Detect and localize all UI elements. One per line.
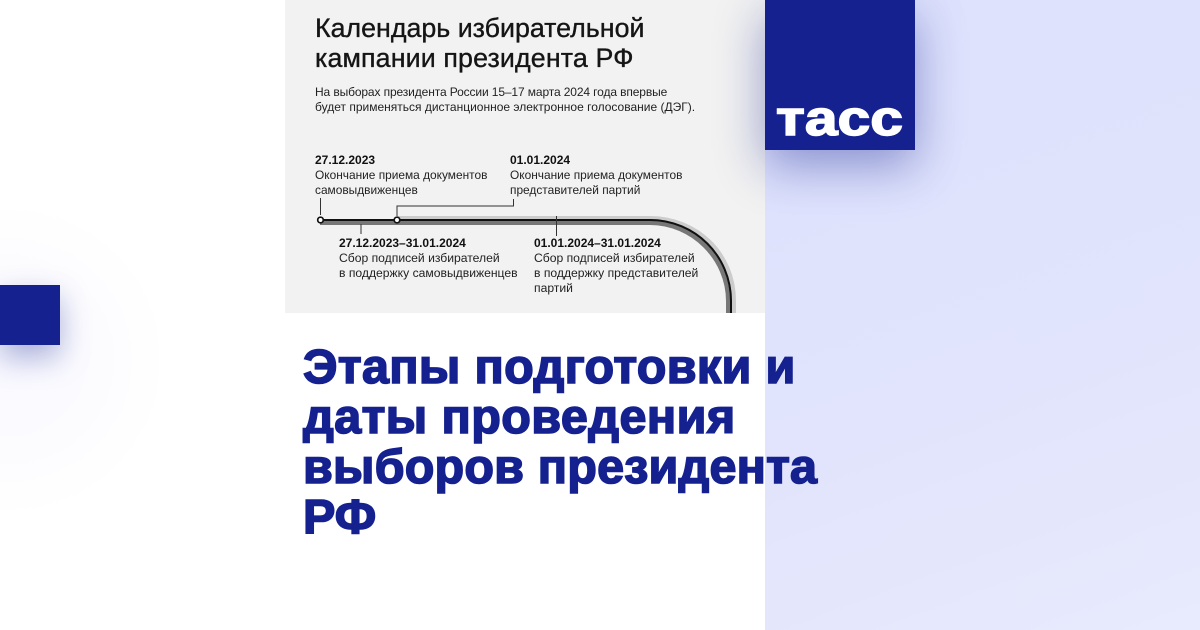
background: left soft glow [0,200,170,520]
milestone 01.01.2024: представителей партий [510,183,640,197]
logo block: TASS [765,0,915,150]
period: self-nominated signatures: 27.12.2023–31.01.2024 [339,236,466,250]
milestone 01.01.2024 [510,153,682,197]
background: right lilac panel [765,0,1200,630]
period: self-nominated signatures [339,236,518,280]
main title: РФ [303,490,376,544]
main title: Этапы подготовки и [303,340,796,394]
infographic heading: Календарь избирательной [315,13,644,43]
period: party signatures: партий [534,281,573,295]
panel: infographic preview [285,0,765,313]
period: party signatures: Сбор подписей избирателей [534,251,695,265]
milestone 27.12.2023 [315,153,487,197]
main title: выборов президента [303,440,817,494]
milestone 27.12.2023: самовыдвиженцев [315,183,418,197]
infographic intro text: будет применяться дистанционное электронное голосование (ДЭГ). [315,100,695,114]
milestone 01.01.2024: 01.01.2024 [510,153,570,167]
period: party signatures [534,236,698,295]
period: self-nominated signatures: Сбор подписей избирателей [339,251,500,265]
period: party signatures: в поддержку представителей [534,266,698,280]
decorative blue square [0,285,60,345]
period: self-nominated signatures: в поддержку самовыдвиженцев [339,266,518,280]
milestone 27.12.2023: 27.12.2023 [315,153,375,167]
main title: даты проведения [303,390,736,444]
infographic heading [315,13,644,73]
milestone 01.01.2024: Окончание приема документов [510,168,682,182]
timeline chart [316,198,736,313]
period: party signatures: 01.01.2024–31.01.2024 [534,236,661,250]
infographic heading: кампании президента РФ [315,43,634,73]
infographic intro text [315,85,695,114]
logo wordmark: тасс [776,92,903,146]
infographic intro text: На выборах президента России 15–17 марта 2024 года впервые [315,85,667,99]
milestone 27.12.2023: Окончание приема документов [315,168,487,182]
